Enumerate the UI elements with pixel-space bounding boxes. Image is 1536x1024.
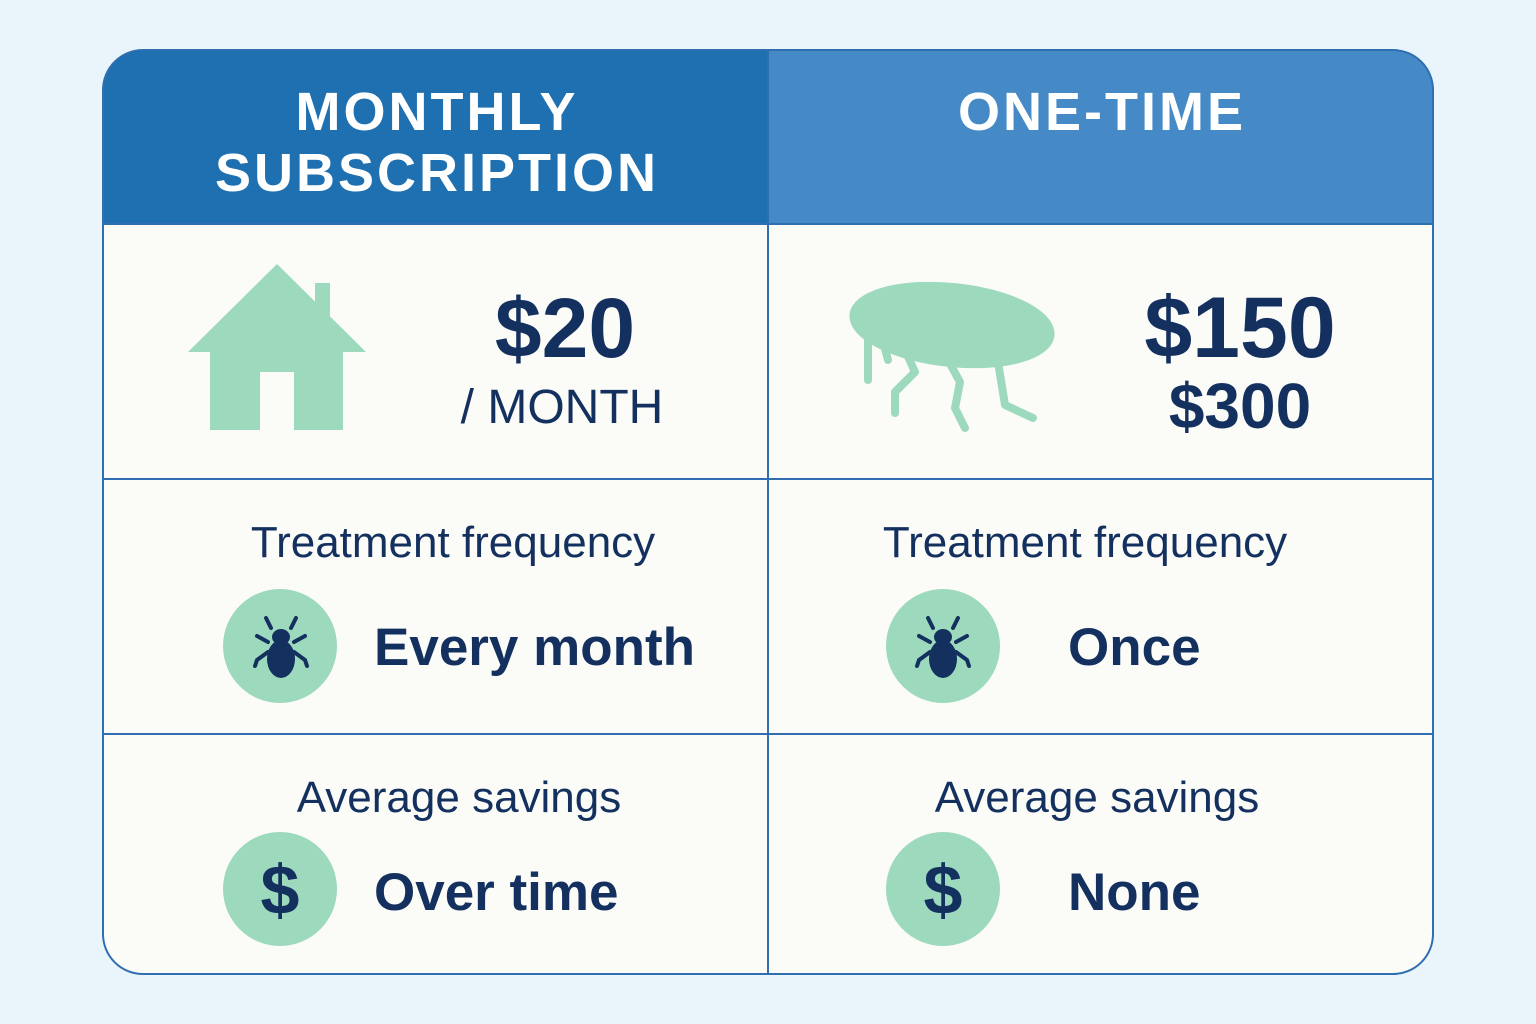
icon: bug right [886,589,1000,703]
icon: flea [850,277,1054,428]
row: average savings [297,773,1259,922]
header titles: SUBSCRIPTION [215,143,659,203]
icon: dollar left: $ [261,851,299,929]
row: average savings: Average savings [297,773,621,822]
icon: house [188,264,366,430]
row: treatment frequency: Treatment frequency [251,518,655,567]
icon: dollar right [886,832,1000,946]
price: one-time [1144,280,1336,442]
row: treatment frequency: Treatment frequency [883,518,1287,567]
price: monthly: / MONTH [461,381,663,434]
price: monthly: $20 [495,281,635,375]
row: average savings: Average savings [935,773,1259,822]
header: monthly subscription [103,50,768,224]
icon: dollar left [223,832,337,946]
row: average savings: None [1068,863,1200,922]
price: one-time: $300 [1169,370,1311,442]
row: average savings: Over time [374,863,619,922]
header titles: MONTHLY [295,82,579,142]
row: treatment frequency [251,518,1287,677]
price: monthly [461,281,663,434]
row: treatment frequency: Once [1068,618,1201,677]
header titles: ONE-TIME [958,82,1246,142]
comparison card [103,50,1433,974]
price: one-time: $150 [1144,280,1336,376]
icon: dollar right: $ [924,851,962,929]
header: one-time [768,50,1433,224]
row: treatment frequency: Every month [374,618,695,677]
header titles [215,82,1246,203]
icon: bug left [223,589,337,703]
